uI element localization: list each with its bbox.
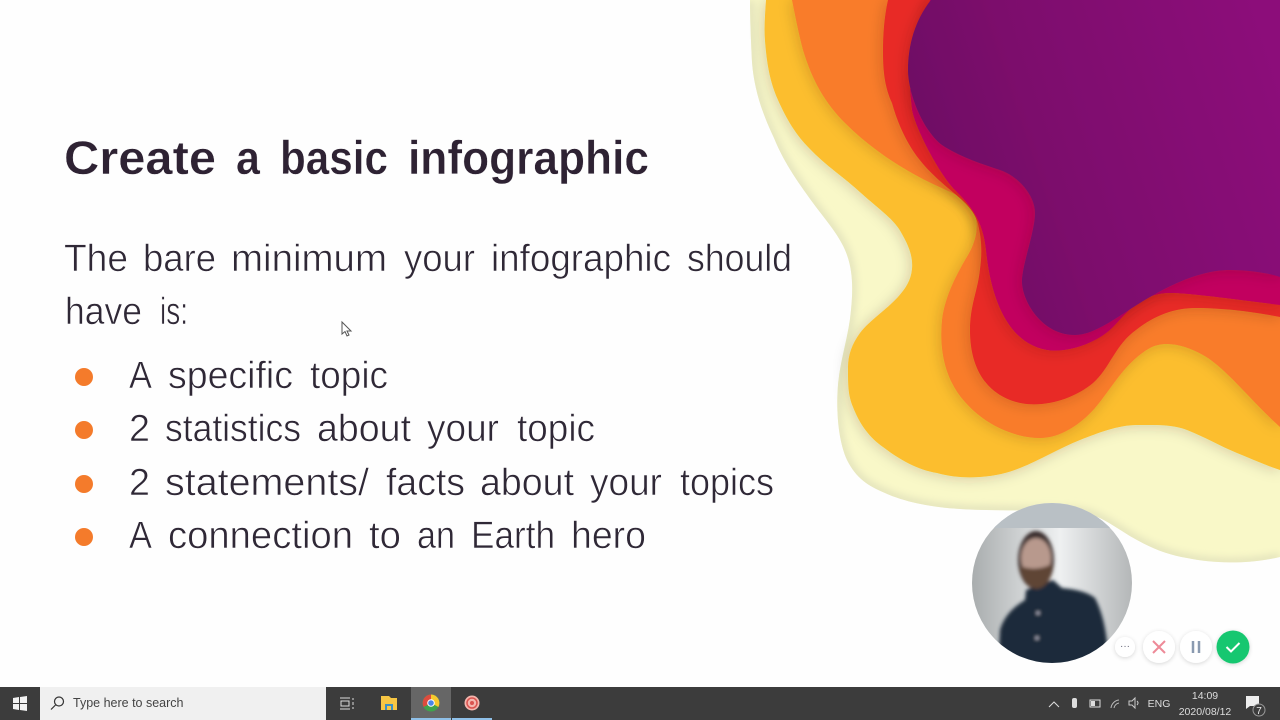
intro text: should [687, 238, 792, 280]
bullet 1 [75, 355, 388, 397]
bullet list [75, 355, 774, 557]
system tray [1049, 690, 1231, 718]
bullet 2: about [317, 408, 411, 450]
layer: yellow [765, 0, 1280, 477]
bullet 3: statements/ [165, 462, 369, 504]
bullet 3: 2 [129, 462, 150, 504]
bullet 4: to [369, 515, 401, 557]
bullet 2: your [427, 408, 499, 450]
bullet 3 [75, 462, 774, 504]
bullet 3: facts [386, 462, 465, 504]
system tray: ENG [1148, 698, 1170, 710]
taskbar [0, 687, 1280, 720]
notification centre: 7 [1256, 706, 1262, 717]
layer: orange [792, 0, 1280, 438]
bullet 4: an [417, 515, 455, 557]
mouse cursor [342, 322, 351, 336]
system tray: 2020/08/12 [1179, 706, 1231, 718]
search box [40, 687, 326, 720]
layer: purple [908, 0, 1280, 335]
title: a [236, 131, 261, 184]
icon: task view [340, 698, 353, 709]
layer: red [883, 0, 1280, 404]
search box: Type here to search [73, 696, 184, 710]
decorative layered paper-cut shape [750, 0, 1280, 562]
bullet 3: about [480, 462, 574, 504]
icon: chrome [422, 694, 440, 712]
intro text: bare [143, 238, 216, 280]
bullet 3: topics [680, 462, 774, 504]
layer: crimson [910, 0, 1280, 351]
intro text: The [64, 238, 128, 280]
bullet 4: connection [168, 515, 353, 557]
title [64, 131, 649, 184]
bullet 2: topic [517, 408, 595, 450]
recording controls [1115, 630, 1250, 664]
bullet 4 [75, 515, 646, 557]
intro text: minimum [231, 238, 387, 280]
bullet 2: statistics [165, 408, 301, 450]
icon: windows start [13, 696, 27, 711]
intro text: infographic [491, 238, 671, 280]
more button: ··· [1120, 641, 1130, 652]
bullet 4: A [129, 515, 153, 557]
icon: screen recorder app [464, 696, 480, 710]
bullet 2 [75, 408, 595, 450]
intro text [64, 238, 792, 333]
bullet 3: your [590, 462, 662, 504]
bullet 4: Earth [471, 515, 555, 557]
chrome highlight [411, 687, 451, 720]
title: infographic [408, 131, 649, 184]
icon: file explorer [381, 696, 397, 710]
cancel button [1143, 631, 1175, 663]
notification centre [1246, 696, 1265, 717]
intro text: have [65, 291, 142, 333]
intro text: is: [160, 291, 188, 333]
intro text: your [404, 238, 475, 280]
system tray: 14:09 [1192, 690, 1218, 702]
done button [1216, 630, 1250, 664]
pause button [1180, 631, 1212, 663]
bullet 4: hero [571, 515, 646, 557]
layer: pale cream [750, 0, 1280, 562]
title: basic [280, 131, 388, 184]
bullet 1: specific [168, 355, 293, 397]
webcam bubble [972, 503, 1132, 670]
bullet 1: A [129, 355, 153, 397]
bullet 2: 2 [129, 408, 150, 450]
title: Create [64, 131, 216, 184]
bullet 1: topic [310, 355, 388, 397]
